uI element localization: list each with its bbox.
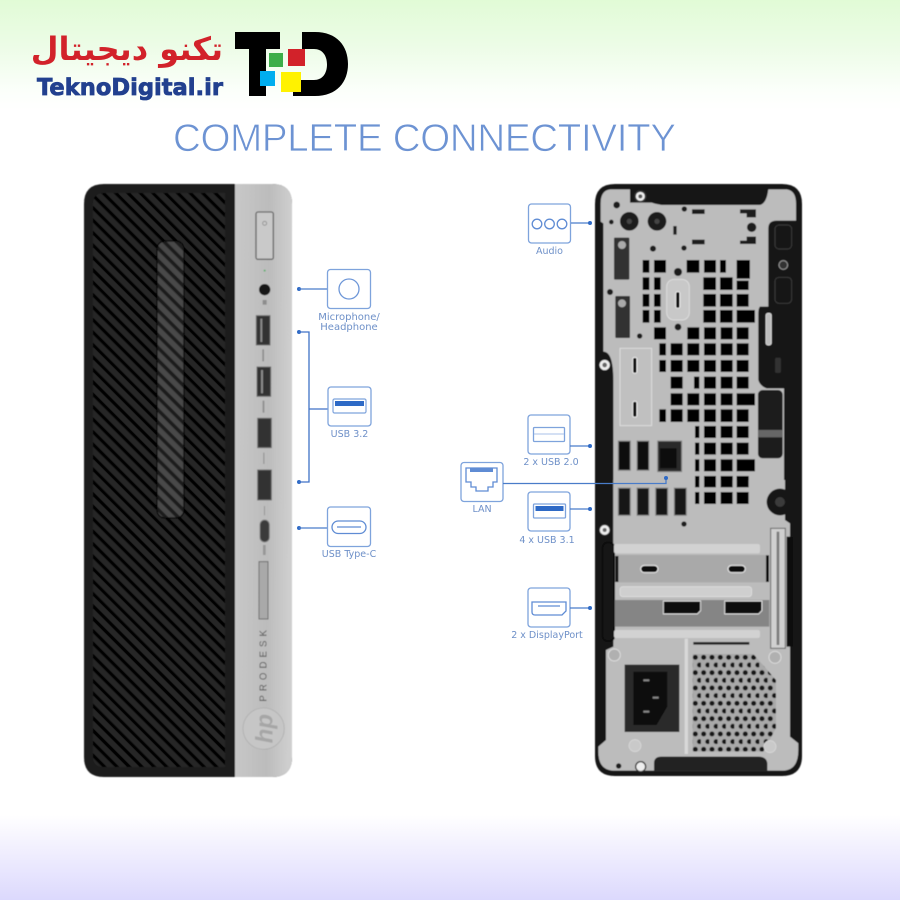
callout: 2 x DisplayPort: 2 x DisplayPort [511, 630, 583, 641]
top vent notch [653, 185, 767, 204]
lower rear metal [598, 480, 798, 771]
callout: Audio [528, 204, 592, 257]
front chassis [84, 184, 292, 777]
callout: 4 x USB 3.1: 4 x USB 3.1 [519, 535, 575, 546]
callout: 4 x USB 3.1 [519, 492, 592, 546]
black clip [758, 390, 783, 458]
headphone jack [259, 284, 270, 295]
VGA knockout [667, 279, 689, 320]
HP logo [243, 708, 284, 749]
HP logo: hp [251, 714, 278, 743]
logo Persian name: تكنو ديجيتال [31, 30, 223, 68]
callout: microphone headphone: Headphone [320, 322, 378, 333]
callout: USB 3.2: USB 3.2 [331, 429, 368, 440]
side rail left [603, 543, 614, 641]
logo mark TD [235, 32, 348, 96]
title: COMPLETE CONNECTIVITY [173, 117, 676, 160]
vent grid lower [695, 477, 749, 504]
optical drive slot [157, 241, 184, 518]
callout: USB Type-C [297, 507, 377, 560]
USB ports front [256, 316, 271, 500]
power button [256, 212, 273, 259]
front ventilated black panel [93, 193, 225, 767]
USB 3.1 ports rear [618, 488, 686, 515]
rear metal plate [601, 189, 796, 580]
panel: rear of computer [595, 184, 802, 776]
screw top [635, 191, 646, 202]
DisplayPort slot [615, 600, 769, 627]
vent grid [643, 260, 755, 504]
panel: front of computer [84, 184, 292, 777]
expansion slot covers [614, 544, 760, 553]
PRODESK label: PRODESK [258, 629, 269, 702]
bottom notch [654, 757, 767, 771]
callout: USB Type-C: USB Type-C [322, 549, 377, 560]
callout: 2 x USB 2.0 [523, 415, 592, 468]
thumbscrew [767, 489, 793, 515]
callout: USB 3.2 [297, 330, 371, 484]
callout: Audio: Audio [536, 246, 563, 257]
callout: LAN: LAN [472, 504, 492, 515]
audio jacks [620, 212, 666, 231]
fan grille [693, 654, 776, 752]
serial knockout panel [620, 348, 652, 426]
callout: microphone headphone: Microphone/ [318, 312, 380, 323]
callout: 2 x DisplayPort [511, 588, 592, 641]
warning labels [614, 238, 629, 280]
logo: TeknoDigital [31, 30, 348, 101]
logo URL: TeknoDigital.ir [37, 73, 223, 101]
USB C port front [260, 520, 269, 542]
callout: microphone headphone [297, 270, 380, 333]
status LED [264, 270, 266, 272]
silver front strip [235, 184, 292, 777]
callout: 2 x USB 2.0: 2 x USB 2.0 [523, 457, 579, 468]
power socket [625, 665, 679, 732]
rear chassis [595, 184, 802, 776]
right vertical bracket [771, 528, 785, 648]
card reader slot [259, 562, 268, 619]
callout: LAN [461, 462, 668, 515]
USB 2.0 ports and LAN port rear [618, 441, 682, 472]
